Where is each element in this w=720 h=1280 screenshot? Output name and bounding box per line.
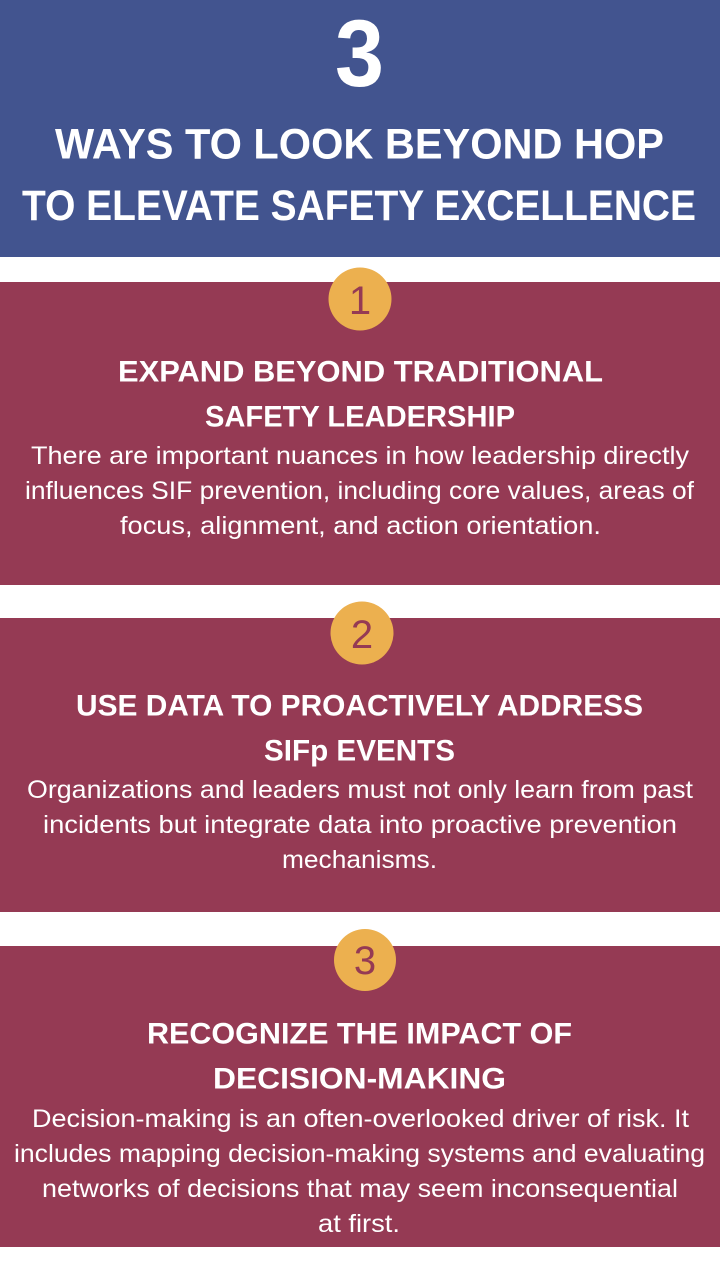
text block: step 2: incidents but integrate data into proactive prevention — [43, 811, 677, 839]
icon: number badge 3: 3 — [354, 939, 376, 983]
text block: step 1 — [25, 442, 694, 540]
heading: step 2: SIFp EVENTS — [264, 734, 455, 768]
heading: step 3 — [147, 1018, 572, 1096]
text block: step 3: at first. — [318, 1210, 400, 1238]
heading: step 1 — [118, 356, 603, 434]
title: WAYS TO LOOK BEYOND HOP — [55, 120, 664, 168]
panel: step 1 — [0, 268, 720, 585]
heading: step 1: EXPAND BEYOND TRADITIONAL — [118, 356, 603, 388]
heading: step 3: DECISION-MAKING — [213, 1062, 506, 1096]
panel: step 3 — [0, 929, 720, 1247]
text block: step 2 — [27, 776, 693, 874]
icon: number badge 1 — [328, 268, 392, 330]
heading: step 3: RECOGNIZE THE IMPACT OF — [147, 1018, 572, 1050]
text block: step 3 — [14, 1105, 705, 1238]
panel: step 2 — [0, 602, 720, 912]
title — [22, 120, 696, 230]
header panel — [0, 0, 720, 257]
heading: step 1: SAFETY LEADERSHIP — [205, 400, 515, 434]
heading: step 2 — [76, 690, 643, 768]
text block: step 1: There are important nuances in how leadership directly — [31, 442, 690, 470]
text block: step 1: influences SIF prevention, including core values, areas of — [25, 477, 694, 505]
icon: number badge 1: 1 — [349, 279, 371, 323]
text block: step 3: Decision-making is an often-overlooked driver of risk. It — [32, 1105, 689, 1133]
icon: number badge 2 — [330, 602, 394, 664]
heading: step 2: USE DATA TO PROACTIVELY ADDRESS — [76, 690, 643, 722]
text block: step 3: networks of decisions that may seem inconsequential — [42, 1175, 678, 1203]
text block: step 2: Organizations and leaders must not only learn from past — [27, 776, 693, 804]
text block: step 1: focus, alignment, and action orientation. — [120, 512, 601, 540]
big number 3: 3 — [335, 1, 384, 107]
text block: step 3: includes mapping decision-making systems and evaluating — [14, 1140, 705, 1168]
icon: number badge 3 — [334, 929, 396, 991]
text block: step 2: mechanisms. — [282, 846, 437, 874]
icon: number badge 2: 2 — [351, 613, 373, 657]
